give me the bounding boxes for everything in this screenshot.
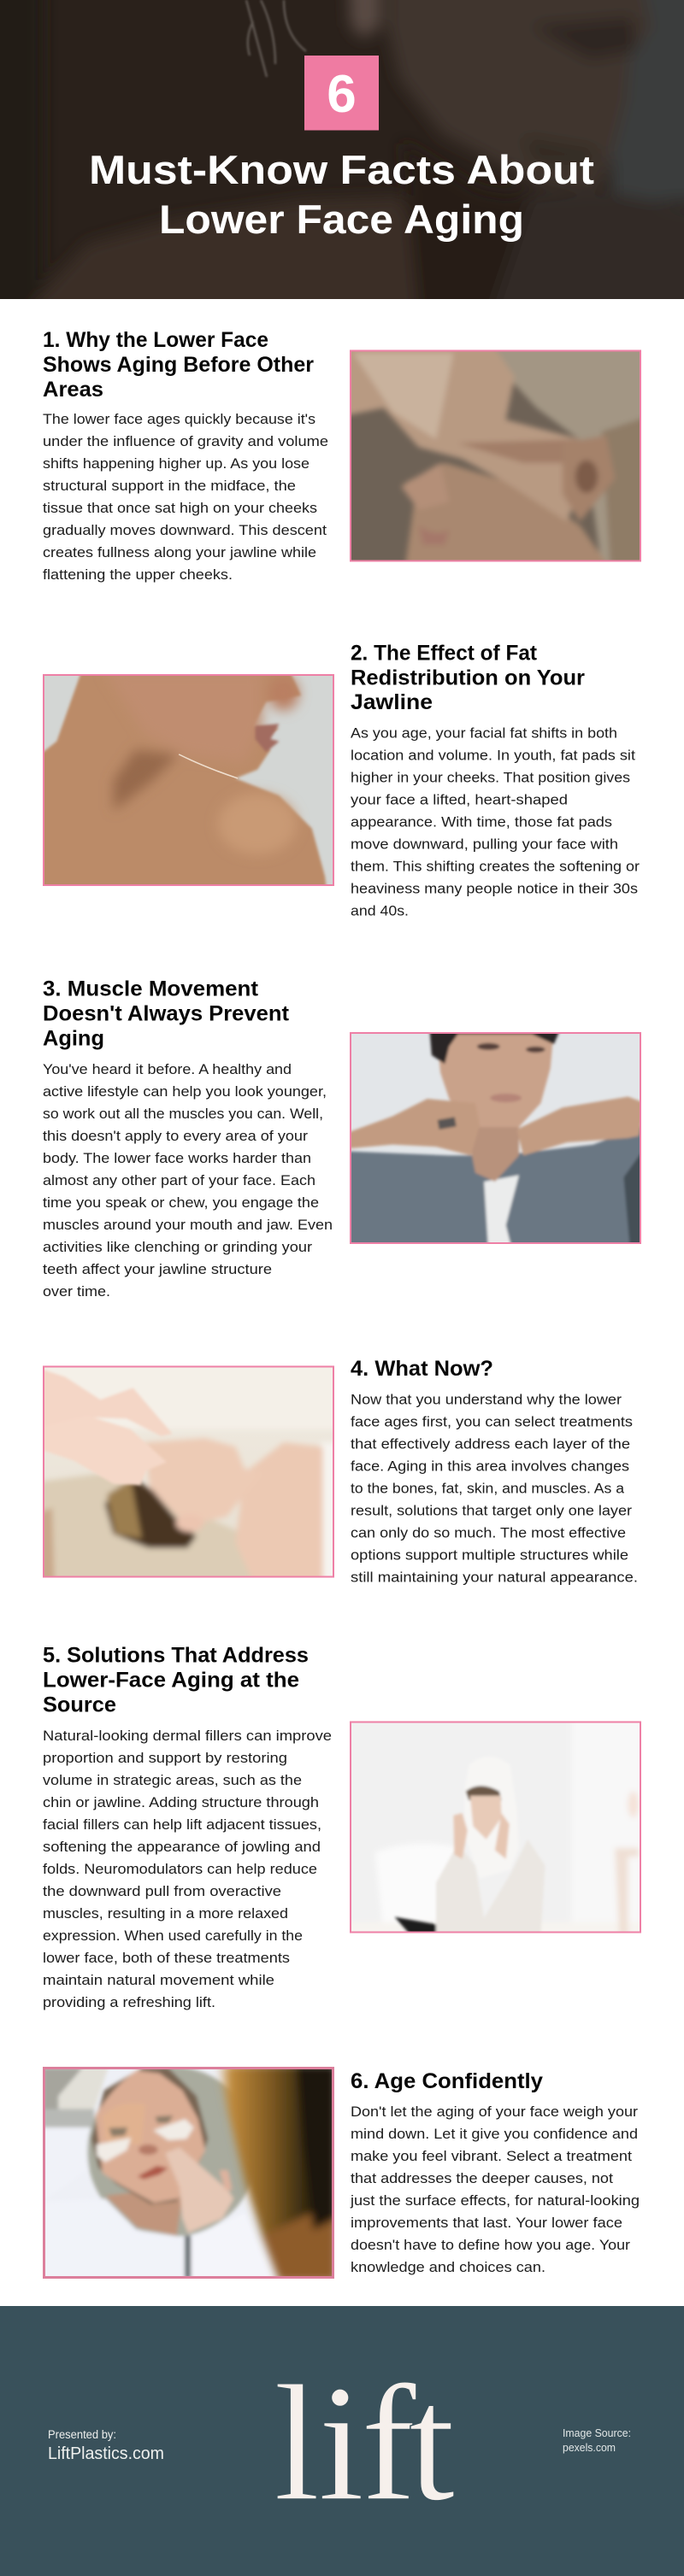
panel: hero header	[0, 0, 684, 325]
heading: fact 1: Shows Aging Before Other	[43, 353, 314, 377]
body text: fact 6: improvements that last. Your lower face	[351, 2215, 622, 2231]
body text: fact 4: that effectively address each layer of the	[351, 1435, 630, 1452]
heading: fact 1: Areas	[43, 378, 103, 402]
number badge: 6	[327, 65, 357, 124]
body text: fact 2: them. This shifting creates the softening or	[351, 858, 640, 875]
heading: fact 4: 4. What Now?	[351, 1357, 493, 1381]
body text: fact 5: providing a refreshing lift.	[43, 1994, 215, 2010]
body text: fact 6: Don't let the aging of your face weigh your	[351, 2104, 638, 2120]
heading: fact 3: 3. Muscle Movement	[43, 977, 259, 1001]
body text: fact 4: can only do so much. The most effective	[351, 1524, 626, 1541]
body text: fact 3: activities like clenching or grinding your	[43, 1239, 312, 1255]
body text: fact 1: tissue that once sat high on your cheeks	[43, 500, 317, 516]
title: Lower Face Aging	[159, 197, 524, 242]
body text: fact 6: just the surface effects, for natural-looking	[350, 2192, 640, 2209]
body text: fact 6: doesn't have to define how you age. Your	[351, 2237, 630, 2253]
photo: neck and shoulder	[35, 667, 334, 894]
body text: fact 1: flattening the upper cheeks.	[43, 566, 233, 583]
heading: fact 5: Lower-Face Aging at the	[43, 1668, 299, 1692]
body text: fact 3: so work out all the muscles you can. Well,	[43, 1106, 323, 1122]
body text: fact 1: under the influence of gravity and volume	[43, 433, 328, 449]
body text: fact 5: folds. Neuromodulators can help reduce	[43, 1861, 317, 1877]
body text: fact 5: maintain natural movement while	[43, 1972, 274, 1988]
body text: fact 3: muscles around your mouth and jaw. Even	[43, 1217, 333, 1233]
body text: fact 1: structural support in the midface, the	[43, 478, 296, 494]
body text: fact 2: appearance. With time, those fat pads	[351, 813, 612, 830]
image source credit: pexels.com	[563, 2441, 616, 2454]
body text: fact 4: face. Aging in this area involves changes	[351, 1458, 629, 1475]
hero background photo	[0, 0, 684, 325]
presenter credit	[48, 2428, 164, 2463]
panel: fact 1	[43, 328, 650, 583]
body text: fact 2	[351, 725, 640, 919]
heading: fact 6: 6. Age Confidently	[351, 2069, 543, 2093]
body text: fact 4: result, solutions that target only one layer	[351, 1502, 632, 1519]
body text: fact 5	[43, 1728, 332, 2010]
body text: fact 4: to the bones, fat, skin, and muscles. As a	[351, 1480, 625, 1497]
image source credit: Image Source:	[563, 2426, 631, 2439]
body text: fact 3	[43, 1061, 333, 1300]
body text: fact 1	[43, 411, 328, 583]
panel: fact 3	[43, 977, 646, 1300]
heading: fact 5: 5. Solutions That Address	[43, 1644, 309, 1668]
heading: fact 5: Source	[43, 1693, 116, 1717]
body text: fact 5: facial fillers can help lift adjacent tissues,	[43, 1816, 321, 1833]
body text: fact 5: expression. When used carefully in the	[43, 1928, 303, 1944]
body text: fact 1: The lower face ages quickly because it's	[43, 411, 315, 427]
body text: fact 4: options support multiple structures while	[351, 1546, 628, 1564]
heading: fact 2: 2. The Effect of Fat	[351, 641, 538, 665]
photo: older person's hand on face	[350, 350, 641, 562]
body text: fact 4: Now that you understand why the lower	[351, 1391, 622, 1408]
title	[89, 147, 594, 242]
heading: fact 1: 1. Why the Lower Face	[43, 328, 268, 352]
heading: fact 3: Doesn't Always Prevent	[43, 1001, 290, 1025]
body text: fact 2: your face a lifted, heart-shaped	[351, 791, 568, 808]
heading: fact 2: Jawline	[351, 690, 433, 714]
body text: fact 2: location and volume. In youth, fat pads sit	[351, 747, 635, 764]
body text: fact 3: time you speak or chew, you engage the	[43, 1194, 319, 1211]
photo: facial massage	[39, 1364, 345, 1582]
heading: fact 2: Redistribution on Your	[351, 666, 585, 690]
body text: fact 3: almost any other part of your face. Each	[43, 1172, 315, 1188]
footer background	[0, 2306, 684, 2576]
body text: fact 5: volume in strategic areas, such as the	[43, 1772, 302, 1788]
body text: fact 6: mind down. Let it give you confidence and	[351, 2126, 638, 2142]
body text: fact 3: over time.	[43, 1283, 110, 1300]
body text: fact 3: active lifestyle can help you look younger,	[43, 1083, 327, 1100]
number badge	[304, 56, 379, 130]
photo: woman pressing fists to jaw	[345, 1029, 646, 1252]
heading: fact 3	[43, 977, 290, 1051]
presenter credit: LiftPlastics.com	[48, 2444, 164, 2463]
panel: fact 5	[43, 1644, 646, 2010]
body text: fact 5: lower face, both of these treatments	[43, 1950, 290, 1966]
body text: fact 5: proportion and support by restoring	[43, 1750, 287, 1766]
body text: fact 5: muscles, resulting in a more relaxed	[43, 1905, 288, 1922]
panel: fact 6	[43, 2065, 640, 2281]
body text: fact 2: As you age, your facial fat shifts in both	[351, 725, 617, 742]
body text: fact 3: body. The lower face works harder than	[43, 1150, 311, 1166]
photo: woman with eye patches in mirror	[43, 2065, 336, 2281]
body text: fact 4: still maintaining your natural appearance.	[351, 1569, 638, 1586]
panel: fact 2	[35, 641, 640, 919]
body text: fact 2: higher in your cheeks. That position gives	[351, 769, 630, 786]
body text: fact 3: You've heard it before. A healthy and	[43, 1061, 292, 1077]
body text: fact 6: make you feel vibrant. Select a treatment	[351, 2148, 632, 2164]
body text: fact 2: and 40s.	[351, 902, 409, 919]
body text: fact 4: face ages first, you can select treatments	[351, 1413, 633, 1430]
heading: fact 2	[351, 641, 585, 714]
heading: fact 5	[43, 1644, 309, 1717]
image source credit	[563, 2426, 631, 2454]
body text: fact 5: softening the appearance of jowling and	[43, 1839, 321, 1855]
body text: fact 5: chin or jawline. Adding structure through	[43, 1794, 319, 1810]
heading: fact 1	[43, 328, 314, 402]
body text: fact 4	[351, 1391, 638, 1586]
body text: fact 3: teeth affect your jawline structure	[43, 1261, 272, 1277]
body text: fact 6: knowledge and choices can.	[351, 2259, 545, 2275]
body text: fact 2: move downward, pulling your face with	[351, 836, 618, 853]
body text: fact 1: shifts happening higher up. As you lose	[43, 455, 310, 472]
body text: fact 2: heaviness many people notice in their 30s	[351, 880, 638, 897]
photo: woman in towel turban	[349, 1717, 646, 1935]
presenter credit: Presented by:	[48, 2428, 116, 2441]
body text: fact 6: that addresses the deeper causes, not	[351, 2170, 613, 2186]
body text: fact 5: the downward pull from overactive	[43, 1883, 281, 1899]
heading: fact 3: Aging	[43, 1027, 104, 1051]
body text: fact 3: this doesn't apply to every area of your	[43, 1128, 308, 1144]
body text: fact 6	[350, 2104, 640, 2275]
title: Must-Know Facts About	[89, 147, 594, 192]
body text: fact 1: creates fullness along your jawline while	[43, 544, 316, 560]
panel: footer	[0, 2306, 684, 2576]
panel: fact 4	[39, 1357, 638, 1586]
logo: lift: lift	[274, 2351, 455, 2536]
body text: fact 5: Natural-looking dermal fillers can improve	[43, 1728, 332, 1744]
body text: fact 1: gradually moves downward. This descent	[43, 522, 327, 538]
